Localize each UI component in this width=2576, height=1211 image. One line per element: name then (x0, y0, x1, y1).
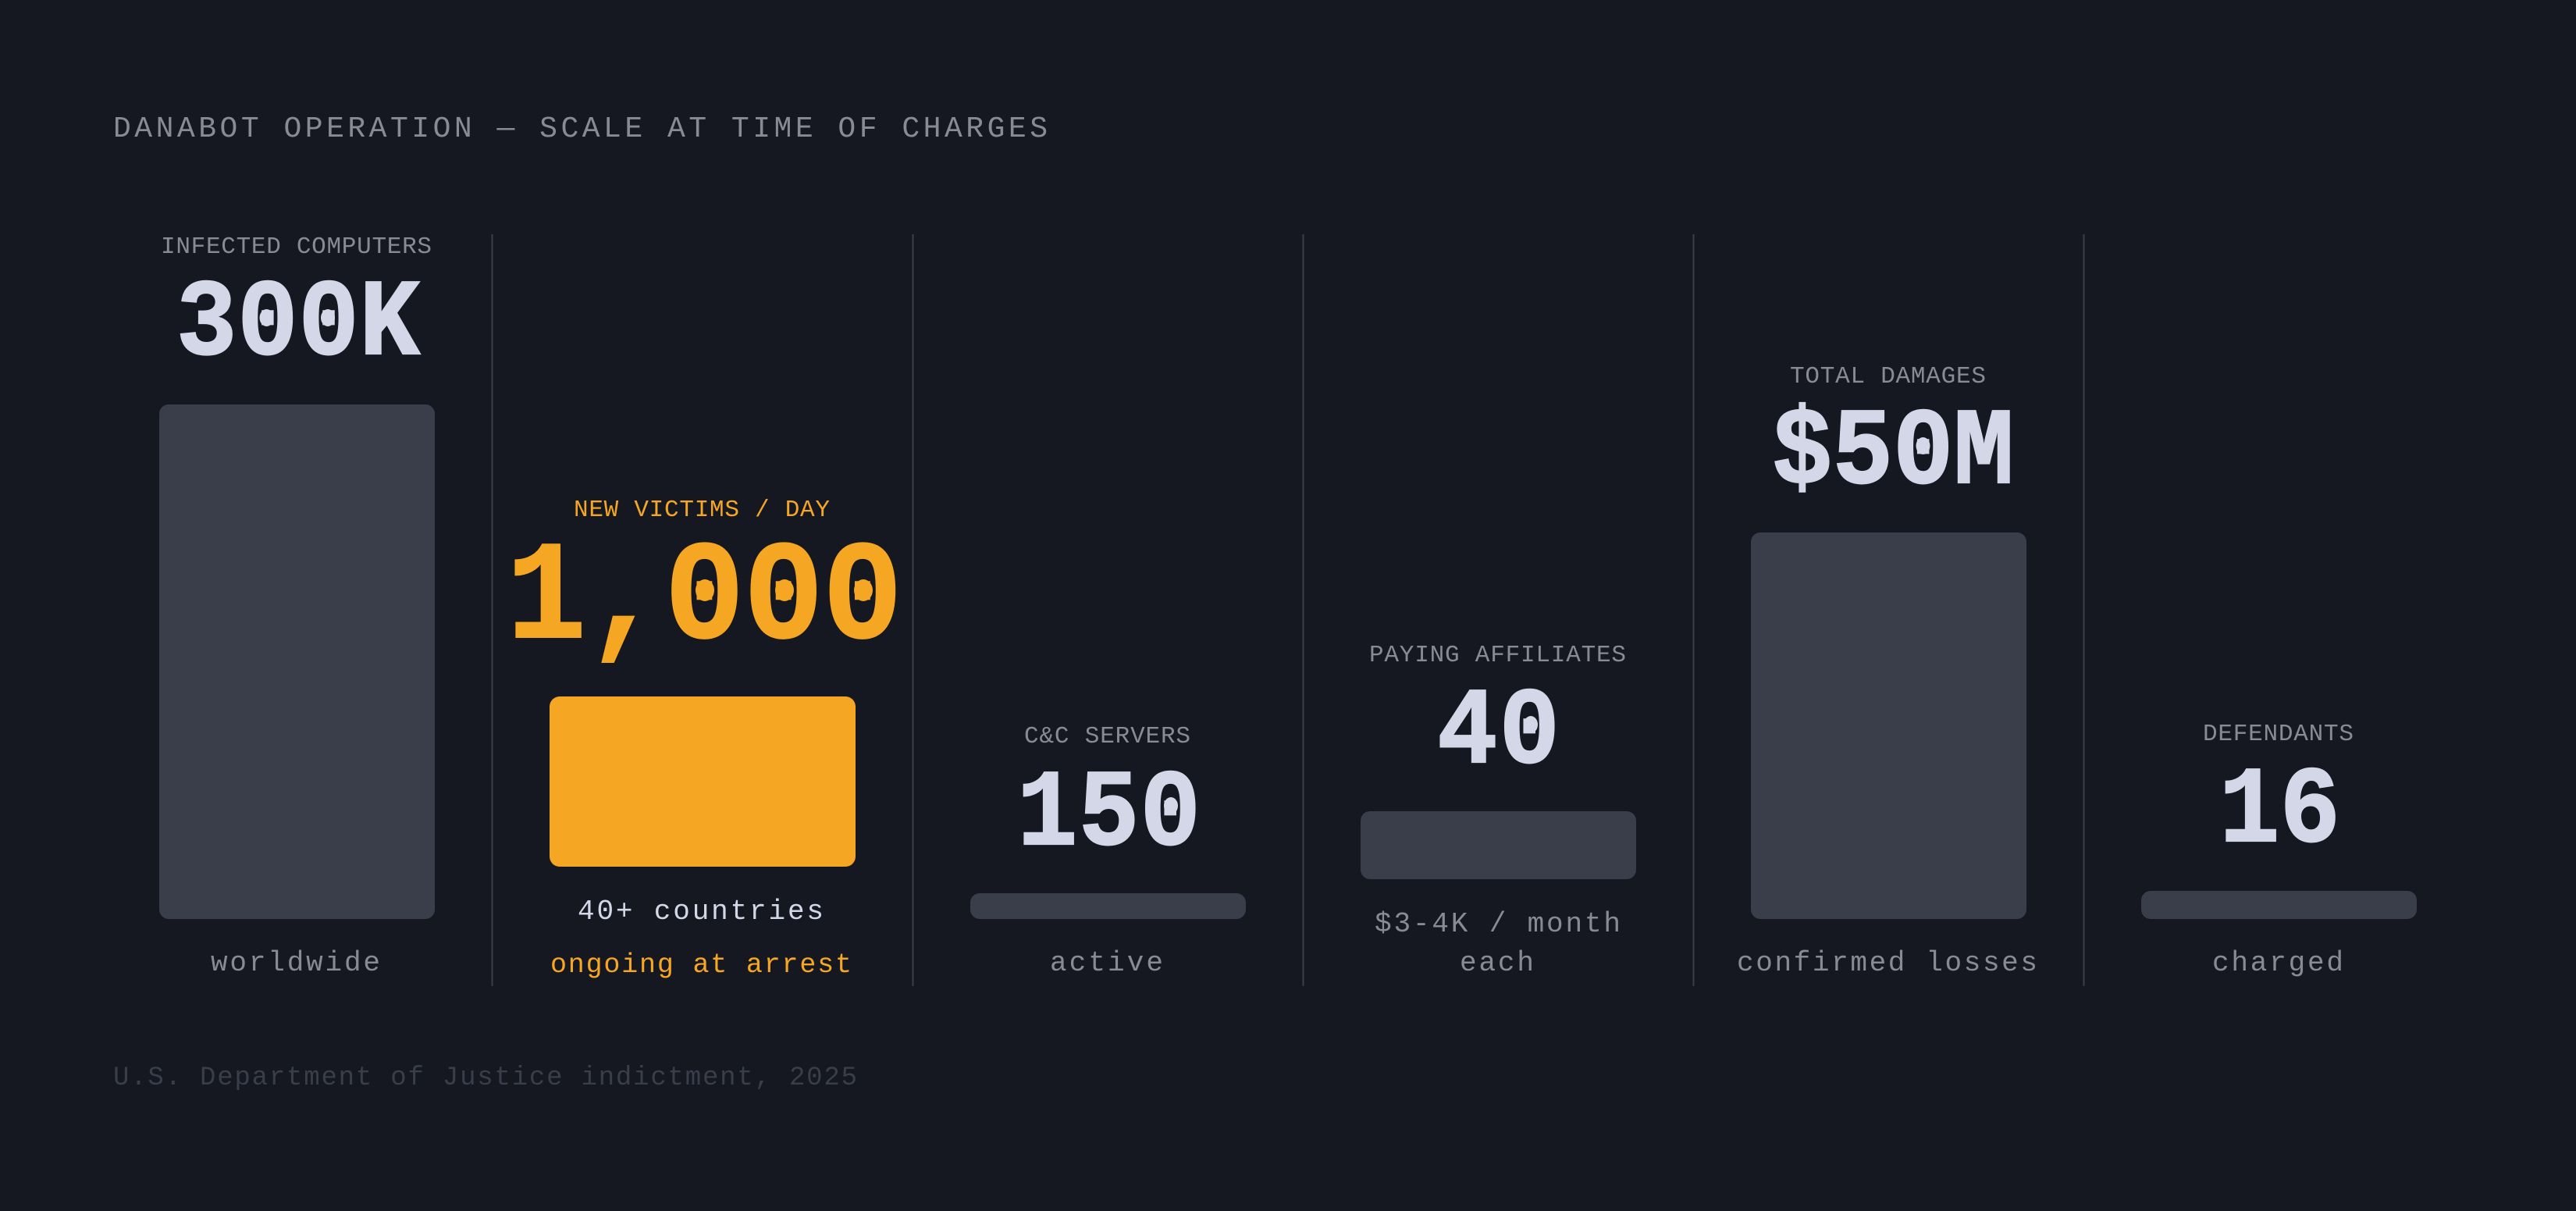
bar: total damages (1751, 532, 2026, 919)
value: 1,000: 1,000 (507, 520, 902, 680)
panel: paying affiliates (1361, 642, 1636, 979)
value: 150: 150 (1017, 754, 1201, 878)
label: new victims per day: NEW VICTIMS / DAY (574, 497, 830, 524)
bar: paying affiliates (1361, 811, 1636, 879)
note: charged: charged (2212, 947, 2343, 979)
title: DANABOT OPERATION — SCALE AT TIME OF CHARGES (113, 112, 1048, 146)
label: defendants: DEFENDANTS (2203, 721, 2354, 748)
value: $50M: $50M (1772, 393, 2014, 516)
note: each: each (1460, 947, 1534, 979)
bar: infected computers (159, 404, 435, 919)
panel: new victims per day (507, 497, 902, 981)
panel: total damages (1737, 363, 2037, 979)
value: 300K: 300K (176, 264, 420, 387)
panel: infected computers (159, 233, 435, 979)
panel: defendants (2141, 721, 2417, 979)
bar: c&c servers (970, 893, 1246, 919)
bar: new victims per day (550, 696, 856, 867)
label: total damages: TOTAL DAMAGES (1790, 363, 1986, 390)
label: infected computers: INFECTED COMPUTERS (161, 233, 432, 261)
bar: defendants (2141, 891, 2417, 919)
note: worldwide: worldwide (211, 947, 380, 979)
value: 16: 16 (2219, 751, 2340, 874)
note: active: active (1050, 947, 1163, 979)
value: 40: 40 (1437, 672, 1560, 796)
label: paying affiliates: PAYING AFFILIATES (1369, 642, 1626, 669)
label: c&c servers: C&C SERVERS (1024, 723, 1190, 750)
note: confirmed losses: confirmed losses (1737, 947, 2037, 979)
note: ongoing at arrest: ongoing at arrest (550, 949, 852, 981)
panel: c&c servers (970, 723, 1246, 979)
note: monthly price: $3-4K / month (1375, 908, 1621, 940)
note: 40+ countries: 40+ countries (578, 896, 824, 928)
source footer: U.S. Department of Justice indictment, 2025 (113, 1063, 857, 1093)
